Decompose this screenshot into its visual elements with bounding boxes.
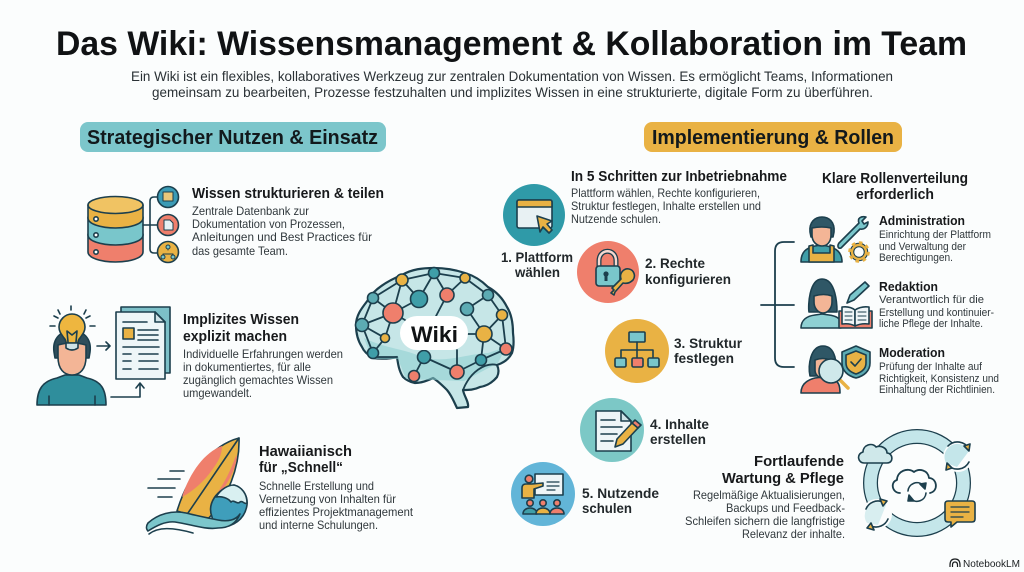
- role: Administration: Berechtigungen.: [879, 252, 953, 264]
- step 4: Inhalte erstellen: 4. Inhalte: [650, 416, 709, 432]
- step 2: Rechte konfigurieren: [577, 241, 731, 303]
- heading: Strategischer Nutzen & Einsatz: Strategischer Nutzen & Einsatz: [87, 127, 378, 149]
- step 5: Nutzende schulen: [511, 462, 659, 526]
- intro text: gemeinsam zu bearbeiten, Prozesse festzuhalten und implizites Wissen in eine strukturierte, digitale Form zu überführen.: [152, 85, 873, 100]
- role: Redaktion: Erstellung und kontinuier-: [879, 307, 994, 319]
- heading: Implizites Wissen explizit machen: Implizites Wissen: [183, 312, 299, 328]
- heading: Hawaiianisch für Schnell: für „Schnell“: [259, 460, 343, 476]
- text: Wissen strukturieren: Anleitungen und Best Practices für: [192, 230, 372, 244]
- step 5: Nutzende schulen: schulen: [582, 500, 632, 516]
- heading: Implizites Wissen explizit machen: [183, 312, 299, 345]
- heading: Fortlaufende Wartung & Pflege: Wartung & Pflege: [722, 471, 844, 487]
- text: steps summary: Plattform wählen, Rechte konfigurieren,: [571, 186, 760, 200]
- role: Moderation: [801, 345, 999, 396]
- icon: maintenance cycle: [859, 436, 975, 530]
- step 1: Plattform wählen: [501, 184, 573, 280]
- step 1: Plattform wählen: 1. Plattform: [501, 249, 573, 265]
- intro text: Ein Wiki ist ein flexibles, kollaboratives Werkzeug zur zentralen Dokumentation von Wissen. Es ermöglicht Teams, Informationen: [131, 69, 893, 84]
- text: Hawaiianisch: und interne Schulungen.: [259, 518, 378, 532]
- role: Administration: Administration: [879, 213, 965, 228]
- intro text: [131, 69, 893, 100]
- heading: In 5 Schritten: In 5 Schritten zur Inbetriebnahme: [571, 169, 787, 185]
- text: Implizites Wissen: [183, 347, 343, 400]
- step 5: Nutzende schulen: 5. Nutzende: [582, 485, 659, 501]
- text: Implizites Wissen: umgewandelt.: [183, 386, 252, 400]
- icon: Wiki brain network: [356, 268, 514, 408]
- role: Redaktion: [801, 279, 994, 330]
- text: Wartung: [685, 488, 845, 541]
- heading: Implementierung & Rollen: Implementierung & Rollen: [652, 127, 894, 149]
- text: Wartung: Backups und Feedback-: [726, 501, 845, 515]
- heading: Klare Rollenverteilung erforderlich: [822, 171, 968, 203]
- step 3: Struktur festlegen: 3. Struktur: [674, 335, 743, 351]
- role: Administration: [801, 213, 991, 264]
- bracket connector: [761, 242, 794, 367]
- role: Redaktion: liche Pflege der Inhalte.: [879, 318, 983, 330]
- step 3: Struktur festlegen: festlegen: [674, 350, 734, 366]
- icon: surfboard and wave: [146, 438, 247, 534]
- heading: Hawaiianisch für Schnell: Hawaiianisch: [259, 444, 352, 460]
- icon: person with lightbulb and document: [37, 306, 170, 405]
- role: Moderation: Richtigkeit, Konsistenz und: [879, 373, 999, 385]
- text: Hawaiianisch: Vernetzung von Inhalten für: [259, 492, 396, 506]
- step 4: Inhalte erstellen: erstellen: [650, 431, 706, 447]
- panel: In 5 Schritten zur Inbetriebnahme: [501, 169, 787, 526]
- step 2: Rechte konfigurieren: konfigurieren: [645, 271, 731, 287]
- text: Wartung: Relevanz der inhalte.: [742, 527, 845, 541]
- text: steps summary: Struktur festlegen, Inhalte erstellen und: [571, 199, 761, 213]
- text: Wissen strukturieren: [192, 204, 372, 258]
- text: Hawaiianisch: [259, 479, 414, 532]
- text: Wissen strukturieren: Zentrale Datenbank zur: [192, 204, 309, 218]
- label: Wiki: Wiki: [411, 322, 458, 347]
- role: Moderation: Einhaltung der Richtlinien.: [879, 384, 995, 396]
- panel: Hawaiianisch: [146, 438, 414, 534]
- role: Administration: Einrichtung der Plattform: [879, 229, 991, 241]
- step 2: Rechte konfigurieren: 2. Rechte: [645, 255, 705, 271]
- text: Wartung: Schleifen sichern die langfristige: [685, 514, 845, 528]
- text: Implizites Wissen: in dokumentiertes, für alle: [183, 360, 311, 374]
- step 4: Inhalte erstellen: [580, 398, 709, 462]
- text: Implizites Wissen: zugänglich gemachtes Wissen: [183, 373, 333, 387]
- role: Administration: und Verwaltung der: [879, 241, 966, 253]
- logo: NotebookLM: NotebookLM: [963, 558, 1020, 570]
- role: Redaktion: Verantwortlich für die: [879, 294, 984, 306]
- heading: Wissen strukturieren & teilen: Wissen strukturieren & teilen: [192, 186, 384, 202]
- step 3: Struktur festlegen: [605, 319, 743, 383]
- panel: Implizites Wissen: [37, 306, 343, 405]
- role: Redaktion: Redaktion: [879, 279, 938, 294]
- step 1: Plattform wählen: wählen: [514, 264, 560, 280]
- panel: Klare Rollenverteilung: [761, 171, 999, 396]
- text: steps summary: Nutzende schulen.: [571, 212, 661, 226]
- text: Wissen strukturieren: Dokumentation von Prozessen,: [192, 217, 345, 231]
- icon: database: [88, 186, 178, 262]
- panel: Wissen strukturieren: [88, 186, 384, 262]
- text: Wartung: Regelmäßige Aktualisierungen,: [693, 488, 845, 502]
- role: Moderation: Moderation: [879, 345, 945, 360]
- text: Implizites Wissen: Individuelle Erfahrungen werden: [183, 347, 343, 361]
- label: Wiki: [400, 316, 468, 350]
- heading: Fortlaufende Wartung & Pflege: Fortlaufende: [754, 454, 844, 470]
- text: Hawaiianisch: effizientes Projektmanagement: [259, 505, 414, 519]
- text: steps summary: [571, 186, 761, 226]
- heading: Implizites Wissen explizit machen: explizit machen: [183, 329, 287, 345]
- heading: Klare Rollenverteilung erforderlich: erforderlich: [856, 187, 934, 203]
- title: Das Wiki: Wissensmanagement & Kollaboration im Team: [56, 25, 967, 63]
- role: Moderation: Prüfung der Inhalte auf: [879, 361, 983, 373]
- heading: Hawaiianisch für Schnell: [259, 444, 352, 476]
- heading: Fortlaufende Wartung & Pflege: [722, 454, 844, 487]
- text: Wissen strukturieren: das gesamte Team.: [192, 244, 288, 258]
- heading: Klare Rollenverteilung erforderlich: Klare Rollenverteilung: [822, 171, 968, 187]
- panel: Fortlaufende Wartung & Pflege: [685, 436, 975, 541]
- text: Hawaiianisch: Schnelle Erstellung und: [259, 479, 374, 493]
